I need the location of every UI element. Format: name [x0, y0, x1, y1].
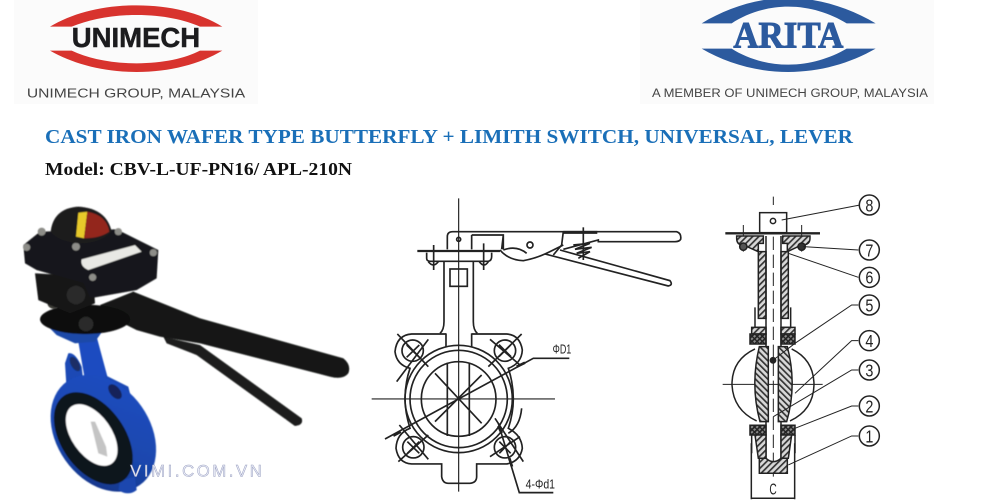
nameplate — [81, 245, 142, 270]
callout 5 — [859, 295, 879, 315]
stem — [766, 236, 781, 477]
callout 7 — [859, 240, 879, 260]
mounting plate — [40, 297, 130, 334]
neck hatching — [752, 252, 795, 334]
centre lines — [372, 198, 555, 492]
lower lever — [163, 337, 302, 426]
logo: Unimech — [14, 0, 258, 104]
rings and disc — [405, 345, 512, 453]
callout 3 — [859, 360, 879, 380]
callout 8: 8 — [865, 195, 873, 215]
dimension C — [751, 443, 795, 499]
callout 8 — [859, 195, 879, 215]
callout 1: 1 — [865, 426, 873, 446]
dimension C: C — [769, 481, 777, 498]
logo: Arita: ARITA — [733, 16, 843, 57]
bracket — [35, 273, 95, 313]
technical drawing: sectional view with numbered callouts — [723, 195, 879, 499]
leader lines — [773, 205, 860, 465]
logo: Arita: A MEMBER OF UNIMECH GROUP, MALAYSIA — [652, 87, 928, 100]
callout 4: 4 — [865, 331, 873, 351]
upper lever — [100, 292, 349, 378]
logo: Unimech: UNIMECH GROUP, MALAYSIA — [27, 86, 246, 100]
callout 2 — [859, 396, 879, 416]
callout 2: 2 — [865, 396, 873, 416]
disc outline — [723, 349, 823, 421]
callout 5: 5 — [865, 295, 873, 315]
handle — [447, 227, 681, 286]
dimension label D1: ΦD1 — [553, 341, 571, 356]
watermark: VIMI.COM.VN — [130, 462, 262, 481]
indicator dome — [51, 207, 112, 243]
bolt holes — [397, 334, 523, 462]
dimension label d1: 4-Φd1 — [526, 477, 555, 492]
upper seats — [750, 334, 795, 344]
lower seat and boss — [750, 425, 795, 473]
callout 3: 3 — [865, 360, 873, 380]
disc hatching — [755, 347, 792, 422]
model subtitle: Model: CBV-L-UF-PN16/ APL-210N — [45, 159, 352, 179]
valve top flange — [48, 327, 103, 343]
body outline — [395, 334, 522, 483]
limit switch box — [23, 229, 158, 298]
top block and flange — [725, 197, 820, 252]
title: CAST IRON WAFER TYPE BUTTERFLY + LIMITH SWITCH, UNIVERSAL, LEVER — [45, 126, 854, 148]
callout 4 — [859, 331, 879, 351]
logo: Unimech: UNIMECH — [72, 22, 200, 53]
box screws — [23, 228, 157, 281]
dimension leaders — [385, 358, 569, 493]
product photo: valve with limit switch and lever — [23, 207, 349, 500]
neck — [440, 261, 477, 347]
technical drawing: front view — [372, 198, 681, 493]
valve body — [29, 337, 178, 500]
logo: Arita — [640, 0, 934, 104]
top flange — [417, 243, 500, 270]
callout 6: 6 — [865, 268, 873, 288]
callout 7: 7 — [865, 240, 873, 260]
callout 6 — [859, 267, 879, 288]
callout 1 — [859, 426, 879, 446]
